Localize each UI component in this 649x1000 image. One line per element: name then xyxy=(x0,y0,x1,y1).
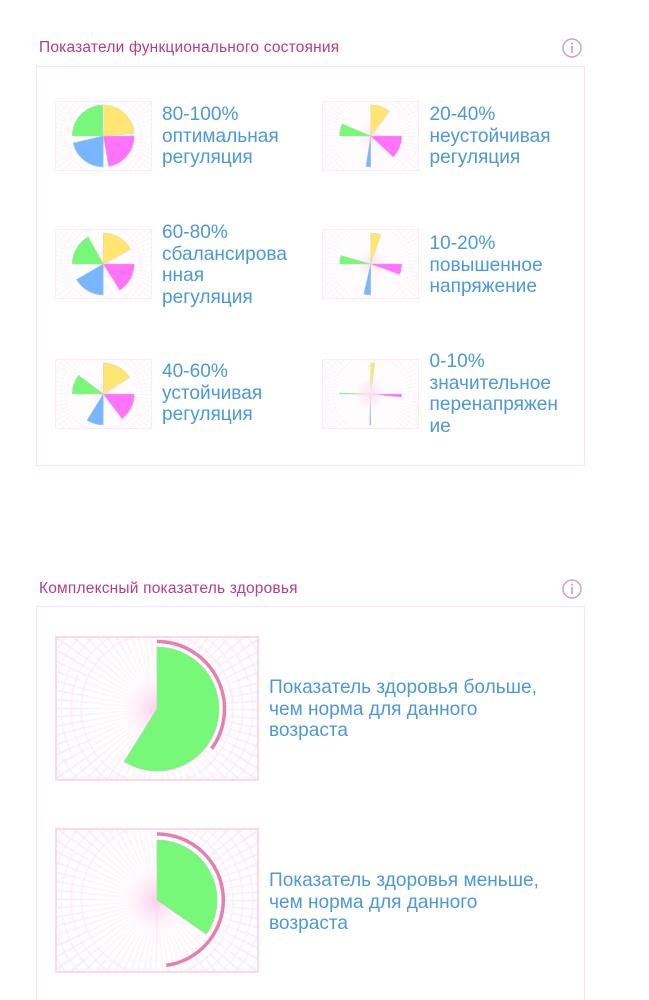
item: 10-20%: 10-20% xyxy=(430,233,495,254)
item: 80-100%: 80-100% xyxy=(162,104,238,125)
item: health above norm xyxy=(55,636,537,781)
item: 20-40% xyxy=(322,101,551,171)
item: 0-10%: 0-10% xyxy=(430,351,485,372)
item: health below norm: Показатель здоровья меньше, xyxy=(269,870,539,891)
item: health above norm: Показатель здоровья больше, xyxy=(269,677,537,698)
item: health above norm: возраста xyxy=(269,720,348,741)
item: 0-10%: перенапряжен xyxy=(430,394,558,415)
item: 0-10%: значительное xyxy=(430,373,551,394)
item: 10-20%: повышенное xyxy=(430,255,543,276)
item: 20-40%: регуляция xyxy=(430,147,520,168)
title: functional state: Показатели функционального состояния xyxy=(39,39,339,56)
item: 10-20% xyxy=(322,229,543,299)
icon: info complex health xyxy=(562,579,582,599)
item: 40-60%: 40-60% xyxy=(162,361,228,382)
panel: functional state xyxy=(36,66,585,466)
item: 10-20%: напряжение xyxy=(430,276,537,297)
item: 60-80% xyxy=(55,222,287,308)
item: 60-80%: регуляция xyxy=(162,287,253,308)
panel: complex health xyxy=(36,606,585,1000)
item: 60-80%: нная xyxy=(162,265,204,286)
item: 60-80%: сбалансирова xyxy=(162,244,287,265)
item: 40-60% xyxy=(55,359,262,429)
item: 80-100% xyxy=(55,101,279,171)
item: 0-10%: ие xyxy=(430,416,451,437)
icon: info functional state xyxy=(562,38,582,58)
item: 20-40%: 20-40% xyxy=(430,104,495,125)
title: complex health: Комплексный показатель здоровья xyxy=(39,580,298,597)
item: 40-60%: регуляция xyxy=(162,404,253,425)
item: health below norm: чем норма для данного xyxy=(269,892,477,913)
item: 80-100%: регуляция xyxy=(162,147,253,168)
item: 80-100%: оптимальная xyxy=(162,126,279,147)
item: health below norm xyxy=(55,828,539,973)
item: 20-40%: неустойчивая xyxy=(430,126,551,147)
item: health above norm: чем норма для данного xyxy=(269,699,477,720)
item: 40-60%: устойчивая xyxy=(162,383,262,404)
item: 0-10% xyxy=(322,351,558,437)
item: 60-80%: 60-80% xyxy=(162,222,228,243)
item: health below norm: возраста xyxy=(269,913,348,934)
